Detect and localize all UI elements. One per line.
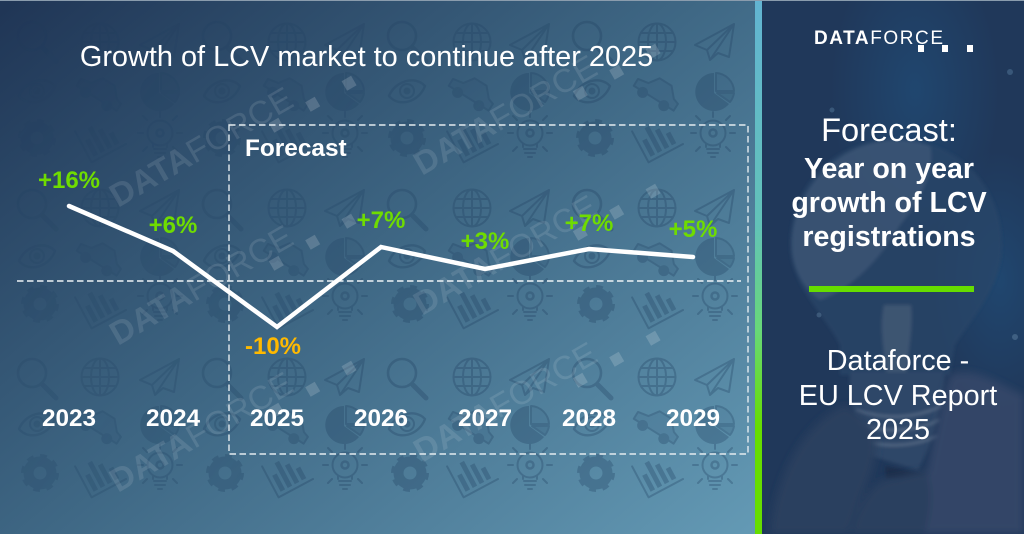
data labels: +6% xyxy=(149,212,197,239)
year axis labels: 2024 xyxy=(146,405,201,432)
background watermarks xyxy=(103,16,661,504)
data labels: +3% xyxy=(461,228,509,255)
top hairline xyxy=(0,0,1024,1)
data labels xyxy=(38,167,717,360)
data labels: +5% xyxy=(669,216,717,243)
sidebar heading xyxy=(791,111,987,253)
zero baseline xyxy=(17,280,741,282)
year axis labels: 2027 xyxy=(458,405,512,432)
panel: chart background xyxy=(0,0,755,534)
report name: 2025 xyxy=(866,414,930,446)
title: Growth of LCV market to continue after 2025 xyxy=(80,41,653,73)
sidebar heading: growth of LCV xyxy=(791,187,987,219)
background watermarks: DATAFORCE xyxy=(103,80,299,214)
forecast region box xyxy=(229,125,748,454)
year axis labels: 2026 xyxy=(354,405,408,432)
green divider xyxy=(809,286,974,292)
year axis labels: 2025 xyxy=(250,405,304,432)
background watermarks: DATAFORCE xyxy=(407,48,603,182)
icon: hand holding the bulb xyxy=(770,372,1024,534)
line chart xyxy=(69,206,693,327)
logo: Dataforce: DATAFORCE xyxy=(814,28,943,49)
sidebar heading: registrations xyxy=(802,221,976,253)
data labels: +16% xyxy=(38,167,100,194)
sidebar heading: Year on year xyxy=(804,153,974,185)
report name xyxy=(799,345,997,446)
report name: EU LCV Report xyxy=(799,380,997,412)
data labels: +7% xyxy=(565,210,613,237)
data labels: -10% xyxy=(245,333,301,360)
data labels: +7% xyxy=(357,207,405,234)
forecast label: Forecast xyxy=(245,135,347,162)
background watermarks: DATAFORCE xyxy=(407,188,603,322)
background icon pattern xyxy=(18,22,737,497)
year axis labels: 2029 xyxy=(666,405,720,432)
accent divider bar xyxy=(755,0,762,534)
sidebar heading: Forecast: xyxy=(821,111,957,148)
background watermarks: DATAFORCE xyxy=(407,335,603,469)
year axis labels xyxy=(42,405,720,432)
year axis labels: 2023 xyxy=(42,405,96,432)
report name: Dataforce - xyxy=(827,345,969,377)
background watermarks: DATAFORCE xyxy=(103,365,299,499)
year axis labels: 2028 xyxy=(562,405,616,432)
icon: light bulb photo xyxy=(790,139,1002,479)
background watermarks: DATAFORCE xyxy=(103,218,299,352)
panel: right sidebar background xyxy=(762,0,1024,534)
